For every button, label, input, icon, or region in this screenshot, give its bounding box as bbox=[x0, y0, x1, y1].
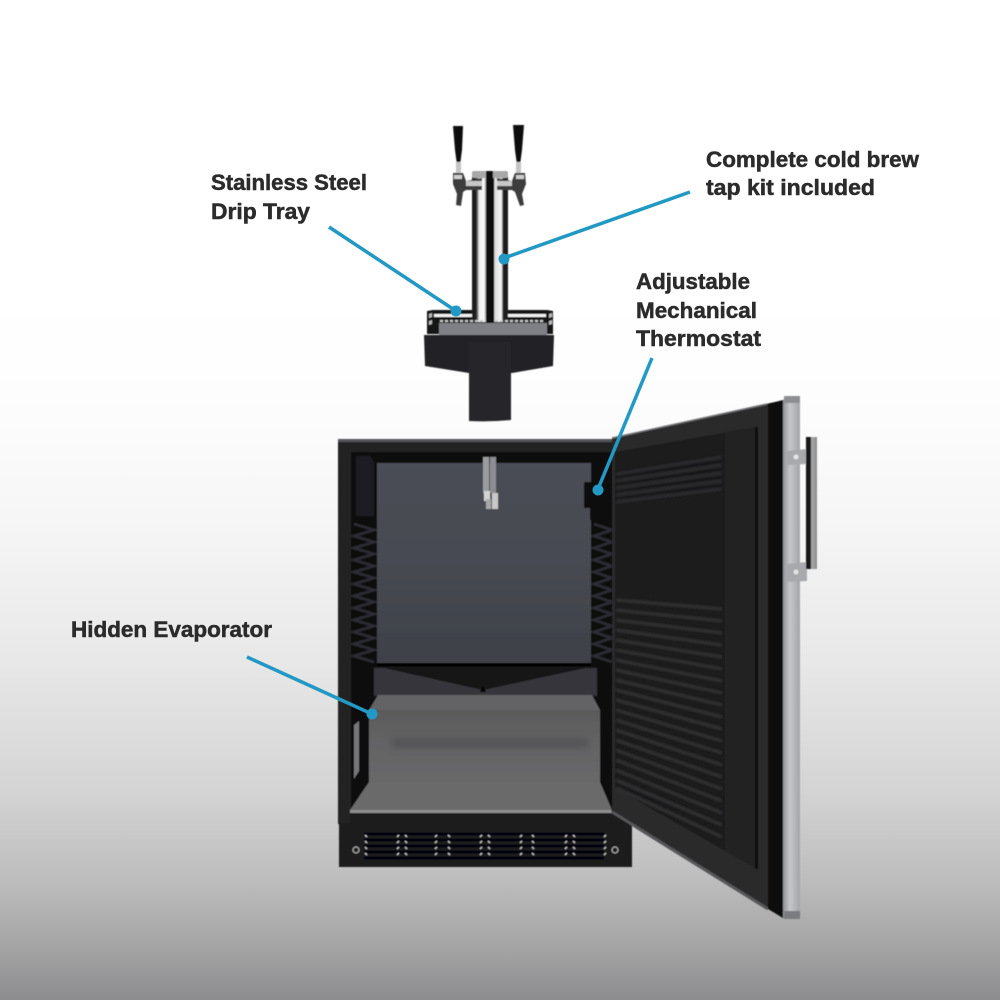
door handle bbox=[806, 437, 817, 569]
chrome column cap bbox=[472, 171, 508, 178]
interior cavity bbox=[351, 452, 614, 810]
handle brackets bbox=[787, 449, 807, 582]
door edge bbox=[768, 400, 783, 918]
rear panel bbox=[377, 463, 591, 664]
drip tray grate bbox=[439, 321, 547, 335]
evaporator cover front bbox=[369, 710, 600, 787]
beer lines bbox=[483, 457, 498, 509]
tower stem bbox=[469, 342, 511, 421]
stainless door edge bbox=[783, 396, 800, 919]
label: adjustable mechanical thermostat: Adjustable bbox=[636, 269, 750, 294]
leader line: tap kit bbox=[504, 192, 690, 258]
bottom grille panel bbox=[339, 812, 632, 867]
dot: evaporator bbox=[366, 708, 378, 720]
label: complete cold brew tap kit bbox=[706, 147, 920, 200]
label: adjustable mechanical thermostat: Thermostat bbox=[636, 326, 762, 351]
left wall ribs bbox=[354, 456, 374, 779]
cabinet frame bbox=[338, 439, 618, 824]
door ribs upper bbox=[616, 457, 722, 502]
leader line: drip tray bbox=[329, 227, 456, 311]
callout: evaporator bbox=[247, 657, 378, 720]
tray base bbox=[424, 335, 554, 373]
callout: tap kit bbox=[498, 192, 690, 264]
evaporator cover top bbox=[369, 695, 600, 710]
cavity floor bbox=[350, 782, 612, 810]
label: adjustable mechanical thermostat bbox=[636, 269, 762, 351]
chrome column bbox=[472, 172, 508, 322]
label: adjustable mechanical thermostat: Mechanical bbox=[636, 298, 757, 323]
dot: tap kit bbox=[498, 254, 510, 264]
thermostat bbox=[584, 482, 612, 520]
label: stainless steel drip tray: Stainless Steel bbox=[211, 170, 367, 195]
leader line: thermostat bbox=[598, 358, 652, 489]
center shank bbox=[486, 171, 493, 322]
label: stainless steel drip tray bbox=[211, 170, 367, 224]
leader line: evaporator bbox=[247, 657, 372, 714]
door outer gasket bbox=[612, 400, 784, 918]
refrigerator cabinet bbox=[338, 439, 632, 867]
open door bbox=[612, 396, 817, 919]
tap tower with drip tray bbox=[424, 125, 554, 421]
callout: thermostat bbox=[592, 358, 652, 496]
left faucet bbox=[453, 126, 482, 206]
cover shadow smear bbox=[390, 739, 590, 747]
dot: drip tray bbox=[450, 306, 462, 316]
right wall ribs bbox=[594, 524, 612, 662]
right faucet bbox=[497, 125, 526, 206]
tray back rail bbox=[427, 310, 553, 334]
callout: drip tray bbox=[329, 227, 462, 316]
label: stainless steel drip tray: Drip Tray bbox=[211, 199, 311, 224]
door ribs lower bbox=[616, 600, 722, 837]
lower funnel bbox=[374, 667, 597, 696]
label: complete cold brew tap kit: tap kit included bbox=[706, 175, 875, 200]
label: hidden evaporator: Hidden Evaporator bbox=[71, 617, 272, 642]
dot: thermostat bbox=[592, 484, 604, 496]
door liner bbox=[615, 427, 757, 869]
label: complete cold brew tap kit: Complete cold brew bbox=[706, 147, 920, 172]
